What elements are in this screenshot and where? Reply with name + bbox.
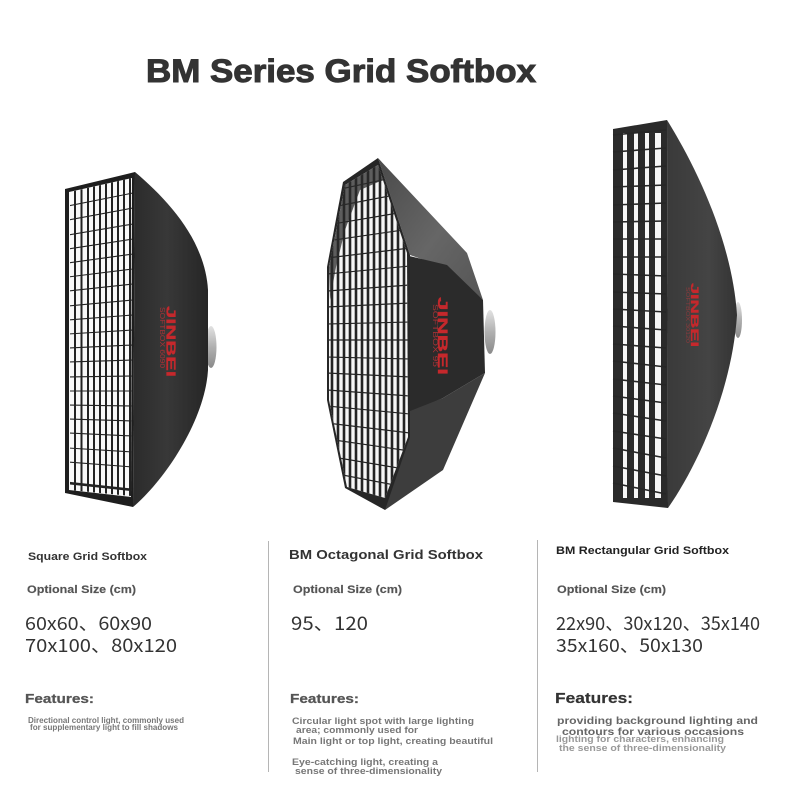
features text	[292, 716, 493, 777]
brand logo: JINBEI	[435, 297, 450, 375]
model label: SOFTBOX 95	[431, 304, 438, 367]
heading: BM Rectangular Grid Softbox	[556, 545, 730, 557]
softbox: rectangular	[613, 120, 742, 508]
connector ring	[484, 310, 496, 354]
features text: providing background lighting and	[557, 715, 758, 727]
softbox body	[667, 120, 737, 508]
sizes	[556, 610, 760, 658]
sizes: 70x100、80x120	[25, 632, 177, 658]
features text: Circular light spot with large lighting	[292, 716, 474, 727]
panel: square grid softbox	[25, 551, 184, 732]
connector ring	[734, 302, 742, 338]
features text	[556, 715, 758, 753]
heading: Square Grid Softbox	[28, 551, 148, 563]
features text: lighting for characters, enhancing	[556, 734, 724, 744]
features text: Eye-catching light, creating a	[292, 757, 439, 768]
centre panel	[405, 255, 485, 415]
brand logo: JINBEI	[164, 306, 178, 377]
features heading: Features:	[25, 691, 94, 706]
front grid	[327, 155, 410, 510]
features text: sense of three-dimensionality	[295, 766, 443, 777]
features text: Directional control light, commonly used	[28, 716, 184, 725]
sizes: 95、120	[291, 610, 368, 636]
brand logo: JINBEI	[688, 283, 700, 347]
size label: Optional Size (cm)	[557, 584, 666, 596]
softbox: octagonal	[327, 155, 496, 510]
features heading: Features:	[290, 691, 359, 706]
features text: the sense of three-dimensionality	[559, 743, 726, 753]
panel: octagonal grid softbox	[289, 548, 493, 777]
size label: Optional Size (cm)	[27, 584, 136, 596]
panel: rectangular grid softbox	[555, 545, 760, 753]
features text	[28, 716, 184, 732]
heading: BM Octagonal Grid Softbox	[289, 548, 483, 562]
features text: area; commonly used for	[296, 725, 418, 736]
model label: SOFTBOX 6090	[158, 307, 165, 368]
title: BM Series Grid Softbox	[146, 53, 536, 89]
connector ring	[206, 326, 216, 368]
sizes: 22x90、30x120、35x140	[556, 610, 760, 636]
bottom panel	[385, 373, 485, 510]
sizes: 35x160、50x130	[556, 632, 703, 658]
top panel	[378, 158, 483, 300]
front grid	[613, 120, 668, 508]
front grid	[65, 172, 135, 507]
features text: for supplementary light to fill shadows	[30, 723, 179, 732]
softbox body	[133, 172, 208, 507]
features heading: Features:	[555, 690, 633, 707]
divider	[536, 540, 538, 772]
model label: SOFTBOX 30120	[684, 287, 690, 343]
divider	[268, 541, 270, 772]
softbox: square	[65, 172, 216, 507]
features text: Main light or top light, creating beautiful	[293, 736, 493, 747]
features text: contours for various occasions	[562, 726, 744, 738]
sizes: 60x60、60x90	[25, 610, 152, 636]
size label: Optional Size (cm)	[293, 584, 402, 596]
sizes	[25, 610, 177, 658]
